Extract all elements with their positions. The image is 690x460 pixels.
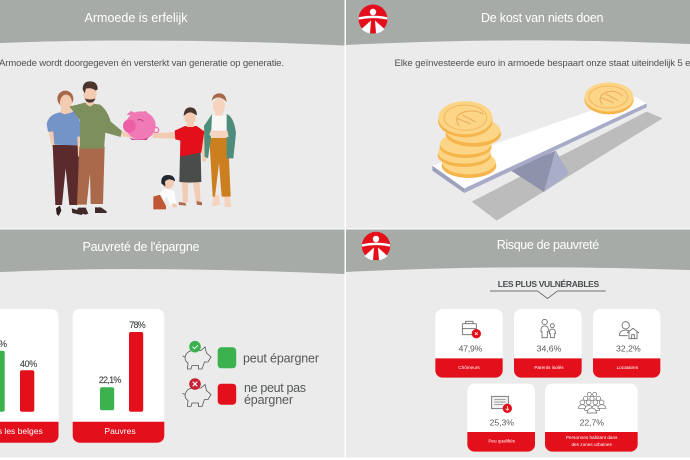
legend: cannot save: ne peut pas: [244, 381, 306, 395]
figure: man in green: [69, 81, 131, 215]
logo: [362, 232, 390, 260]
icon: person and house: [619, 322, 639, 339]
header band: Armoede is erfelijk: [0, 0, 344, 46]
logo: [358, 4, 388, 34]
figure: woman in blue: [47, 91, 83, 216]
panel: De kost van niets doen: [346, 0, 690, 228]
panel: Armoede is erfelijk: [0, 0, 344, 228]
seesaw shadow: [472, 112, 663, 221]
card: Personnes habitant dans des zones urbaines: Personnes habitant dans: [566, 435, 618, 440]
icon: pink piggy bank: [123, 111, 159, 140]
icon: piggy with cross: [182, 378, 211, 406]
card: Parents isolés: 34,6%: [537, 344, 562, 354]
panel: Pauvreté de l'épargne: [0, 230, 344, 458]
card: Pauvres: 22,1%: [99, 375, 121, 385]
header band: De kost van niets doen: [346, 0, 690, 45]
panel: Risque de pauvreté: [346, 230, 690, 458]
card: Locataires: Locataires: [617, 365, 639, 370]
chevron divider: [490, 291, 606, 298]
card: Locataires: [593, 309, 660, 378]
single coin: [584, 82, 634, 114]
card: Chômeurs: 47,9%: [459, 344, 483, 354]
legend: cannot save: épargner: [244, 393, 293, 407]
card: Peu qualifiés: Peu qualifiés: [488, 439, 516, 444]
bar: green 22,1%: [100, 387, 114, 410]
card: Parents isolés: [514, 309, 582, 378]
card: Peu qualifiés: 25,3%: [490, 418, 514, 428]
text block: intro: Armoede wordt doorgegeven én versterkt van generatie op generatie.: [0, 58, 284, 69]
icon: briefcase: [462, 321, 481, 338]
illustration: seesaw with euro coins: [432, 82, 663, 221]
card: Pauvres: [73, 309, 164, 443]
card: Pauvres: 78%: [129, 320, 146, 330]
fulcrum: [510, 151, 569, 192]
heading: LES PLUS VULNÉRABLES: LES PLUS VULNÉRABLES: [498, 279, 600, 289]
card: Personnes habitant dans des zones urbaines: [545, 384, 638, 452]
legend: can save: [182, 341, 319, 369]
card: Pauvres: Pauvres: [104, 426, 136, 436]
header band: Risque de pauvreté: [346, 230, 690, 272]
card: Locataires: 32,2%: [616, 344, 641, 354]
figure: crawling baby: [153, 175, 177, 209]
card: Parents isolés: Parents isolés: [534, 365, 564, 370]
card: Peu qualifiés: [467, 384, 535, 452]
heading: Armoede is erfelijk: Armoede is erfelijk: [84, 11, 188, 25]
card: Personnes habitant dans des zones urbaines: des zones urbaines: [571, 442, 613, 447]
plank: [432, 96, 647, 193]
coin stack: [438, 101, 501, 178]
figure: boy in red: [153, 107, 207, 206]
icon: crowd: [578, 392, 606, 413]
bar: green: [0, 351, 5, 412]
card: Chômeurs: Chômeurs: [458, 365, 480, 370]
card: Tous les belges: 40%: [20, 359, 37, 369]
figure: woman in green cardigan: [204, 93, 236, 207]
card: Chômeurs: [435, 309, 503, 378]
illustration: family with piggy bank: [47, 81, 236, 216]
bar: red 78%: [129, 332, 143, 412]
card: Tous les belges: [0, 309, 59, 443]
icon: piggy with check: [182, 341, 211, 369]
header band: Pauvreté de l'épargne: [0, 230, 344, 274]
icon: parent and child: [541, 319, 555, 338]
bar: red 40%: [20, 370, 34, 412]
icon: diploma: [492, 396, 512, 413]
heading: Risque de pauvreté: Risque de pauvreté: [497, 238, 599, 252]
legend: cannot save: [182, 378, 306, 407]
legend: can save: peut épargner: [243, 352, 319, 366]
heading: De kost van niets doen: De kost van niets doen: [481, 11, 604, 25]
heading: Pauvreté de l'épargne: Pauvreté de l'épargne: [82, 240, 200, 254]
card: Personnes habitant dans des zones urbaines: 22,7%: [580, 418, 604, 428]
